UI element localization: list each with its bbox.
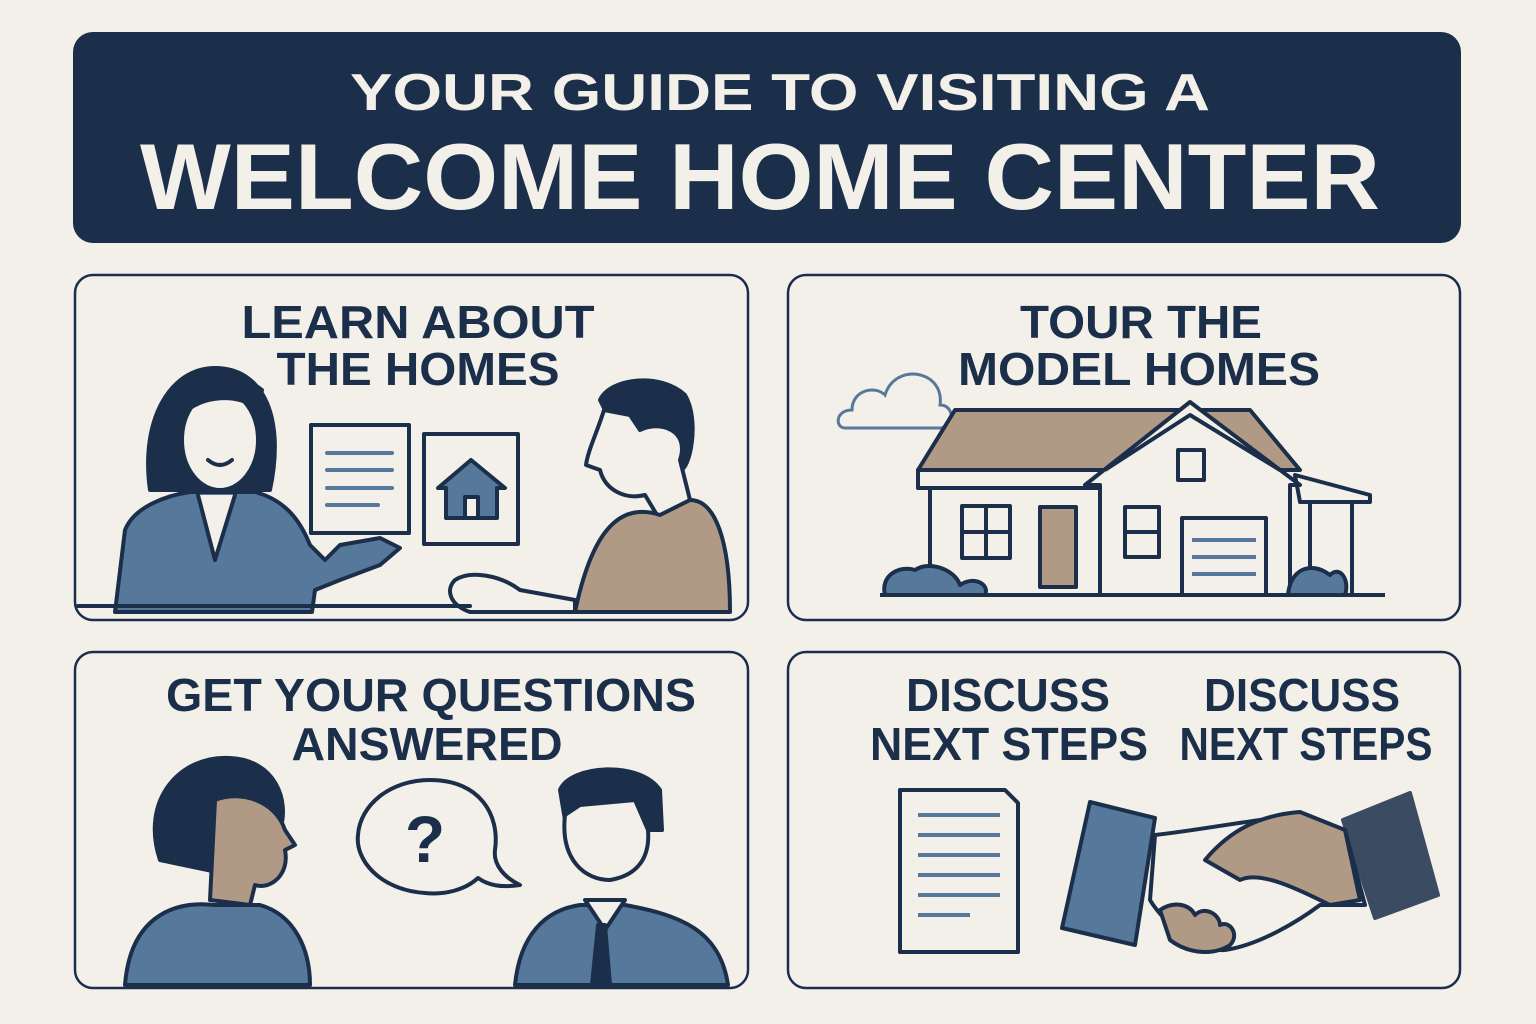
heading: learn about the homes: LEARN ABOUT [242,296,594,348]
man hair and head [600,380,693,470]
header banner [73,32,1461,243]
icon: cloud [838,374,951,428]
heading: get your questions answered: GET YOUR QUESTIONS [166,669,696,721]
heading: get your questions answered [166,669,696,770]
house card [424,434,518,544]
heading: discuss next steps (left) [870,669,1148,770]
woman body [115,492,400,612]
document [311,425,409,533]
heading: discuss next steps (left): NEXT STEPS [870,718,1148,770]
title line 2: WELCOME HOME CENTER [140,124,1380,229]
illustration: woman with question and agent: ? [405,802,445,876]
illustration: house [880,402,1385,595]
panel: get your questions answered [75,652,748,988]
illustration: woman with question and agent [125,758,728,985]
heading: discuss next steps (right) [1180,669,1432,770]
panel: discuss next steps [788,652,1460,988]
woman hair [148,368,275,490]
heading: discuss next steps (right): DISCUSS [1204,669,1400,721]
heading: tour the model homes: TOUR THE [1020,296,1262,348]
heading: get your questions answered: ANSWERED [292,718,562,770]
icon: handshake [1062,793,1438,952]
speech bubble with question mark [358,780,520,893]
heading: discuss next steps (left): DISCUSS [906,669,1110,721]
heading: tour the model homes [958,296,1320,395]
man body [575,500,730,612]
title line 1: YOUR GUIDE TO VISITING A [350,64,1210,122]
man [560,769,662,830]
heading: discuss next steps (right): NEXT STEPS [1180,718,1432,770]
heading: learn about the homes [242,296,594,395]
icon: document [900,790,1018,952]
heading: learn about the homes: THE HOMES [276,343,560,395]
heading: tour the model homes: MODEL HOMES [958,343,1320,395]
panel: tour the model homes [788,275,1460,620]
illustration: agent and visitor [78,368,730,612]
panel: learn about the homes [75,275,748,620]
